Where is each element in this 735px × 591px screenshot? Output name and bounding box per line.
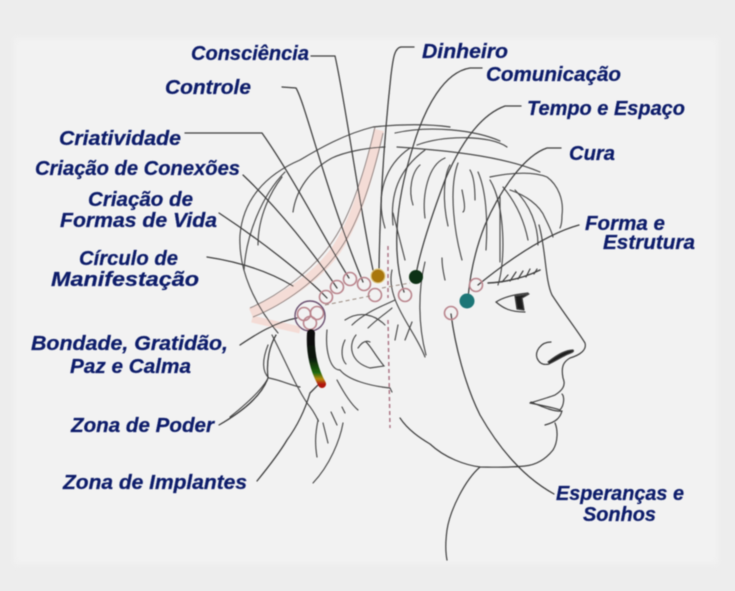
label: Forma e Estrutura: Estrutura: [603, 232, 695, 254]
nose: [537, 342, 551, 364]
label: Bondade, Gratidão, Paz e Calma: [31, 333, 228, 378]
label: Círculo de Manifestação: Círculo de: [79, 248, 178, 270]
label: Zona de Implantes: Zona de Implantes: [62, 472, 247, 494]
eyebrow: [488, 270, 540, 283]
label: Círculo de Manifestação: Manifestação: [51, 269, 199, 291]
leader: Círculo de Manifestação: [207, 257, 293, 286]
label: Esperanças e Sonhos: Sonhos: [583, 504, 656, 526]
eye: [496, 293, 528, 302]
leader: Zona de Implantes: [257, 385, 318, 481]
labels: [31, 41, 695, 526]
leader: Criação de Formas de Vida: [219, 213, 327, 298]
dashed connector: [325, 283, 410, 305]
dark green marker: [409, 270, 423, 284]
pink head band: [250, 127, 383, 330]
leader: Consciência: [311, 56, 373, 270]
leader: Dinheiro: [379, 47, 414, 270]
orange marker: [371, 269, 385, 283]
leader: Tempo e Espaço: [416, 106, 521, 275]
leader: Controle: [282, 87, 363, 282]
teal marker: [460, 294, 474, 308]
ear and hair at ear: [327, 330, 390, 388]
power zone bar: [311, 333, 322, 384]
back of neck hair: [264, 345, 300, 387]
face profile: [400, 225, 585, 560]
leader: Forma e Estrutura: [478, 225, 579, 285]
zone markers: [295, 269, 482, 384]
label: Criatividade: Criatividade: [59, 128, 181, 150]
label: Esperanças e Sonhos: [556, 483, 684, 526]
hair and back of head: [230, 125, 562, 483]
label: Zona de Poder: Zona de Poder: [70, 415, 215, 437]
leader: Criatividade: [185, 133, 349, 278]
label: Cura: Cura: [569, 143, 615, 165]
label: Criação de Conexões: Criação de Conexões: [35, 158, 240, 180]
label: Tempo e Espaço: Tempo e Espaço: [527, 98, 685, 120]
dashed ear line: [388, 246, 390, 428]
label: Forma e Estrutura: Forma e: [585, 213, 665, 235]
label: Criação de Formas de Vida: Formas de Vida: [60, 210, 217, 232]
pink ring markers: [298, 272, 482, 330]
label: Círculo de Manifestação: [51, 248, 199, 291]
leader: Zona de Poder: [219, 335, 276, 425]
leader lines: [185, 47, 579, 494]
leader: Cura: [468, 148, 561, 298]
label: Comunicação: Comunicação: [486, 64, 621, 86]
label: Consciência: Consciência: [191, 43, 309, 65]
label: Bondade, Gratidão, Paz e Calma: Paz e Calma: [70, 356, 191, 378]
label: Forma e Estrutura: [585, 213, 695, 254]
label: Dinheiro: Dinheiro: [422, 41, 508, 63]
large circle: [295, 301, 325, 331]
leader: Criação de Conexões: [243, 175, 337, 288]
leader: Bondade: [240, 318, 297, 345]
label: Criação de Formas de Vida: Criação de: [88, 189, 193, 211]
label: Esperanças e Sonhos: Esperanças e: [556, 483, 684, 505]
label: Bondade, Gratidão, Paz e Calma: Bondade, Gratidão,: [31, 333, 228, 355]
label: Criação de Formas de Vida: [60, 189, 217, 232]
label: Controle: Controle: [165, 77, 251, 99]
leader: Comunicação: [397, 68, 482, 292]
leader: Esperanças e Sonhos: [451, 314, 554, 494]
